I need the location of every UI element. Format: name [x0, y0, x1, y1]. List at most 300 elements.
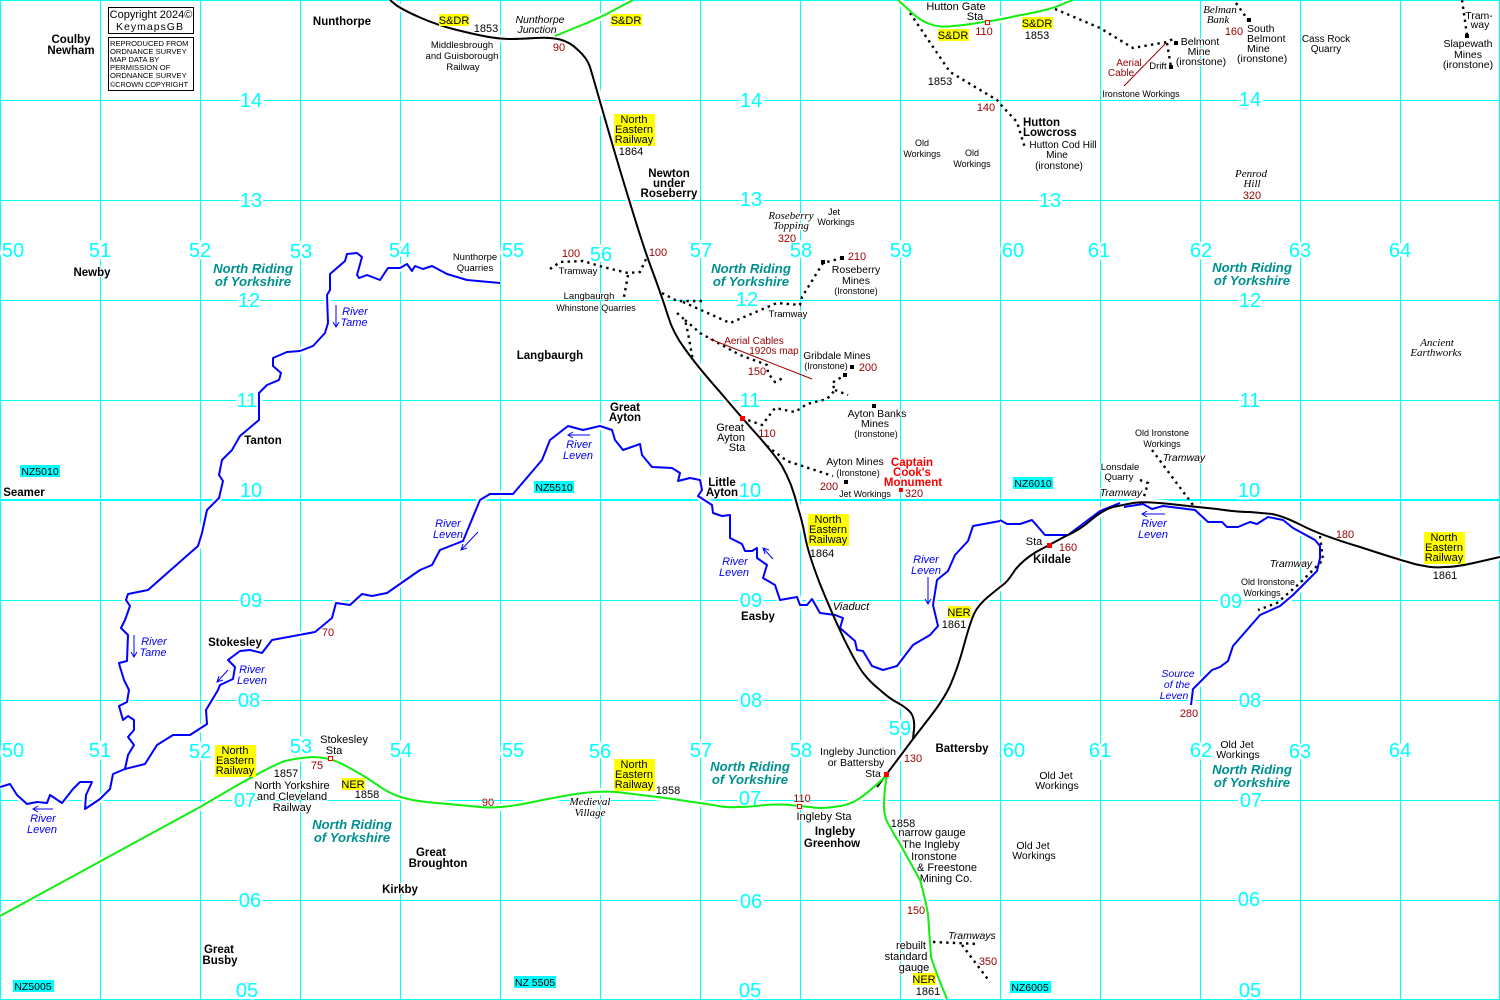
spot heights: 100: [649, 247, 667, 259]
ordnance survey notice: REPRODUCED FROM: [110, 39, 188, 48]
railway: Battersby to Kildale line: [877, 502, 1500, 787]
county labels: North Riding: [213, 261, 293, 276]
historic feature labels: Ancient: [1419, 337, 1455, 349]
spot heights: Aerial: [1116, 58, 1142, 69]
river labels: River: [239, 664, 266, 676]
railway and station labels: [254, 1, 1457, 998]
grid reference numbers: 11: [237, 390, 257, 412]
place names: Seamer: [3, 487, 45, 499]
ordnance survey notice: MAP DATA BY: [110, 55, 159, 64]
grid reference numbers: 63: [1289, 741, 1311, 763]
railway and station labels: rebuilt: [896, 940, 926, 952]
mines and quarries labels: Workings: [1216, 749, 1260, 761]
grid reference numbers: 13: [740, 189, 762, 211]
grid square tags: NZ6005: [1011, 982, 1049, 994]
mines and quarries labels: Old: [915, 138, 929, 148]
spot heights: 350: [979, 956, 997, 968]
grid reference numbers: 12: [736, 289, 758, 311]
mines and quarries labels: (ironstone): [1237, 53, 1287, 65]
river: Leven upper section: [1124, 504, 1320, 705]
mines and quarries labels: Workings: [903, 149, 941, 159]
railway and station labels: Mining Co.: [920, 873, 972, 885]
river labels: Leven: [433, 529, 463, 541]
county labels: of Yorkshire: [1214, 775, 1290, 790]
grid reference numbers: 06: [239, 890, 261, 912]
yellow railway labels: Railway: [615, 779, 654, 791]
mines and quarries labels: Jet Workings: [839, 489, 891, 499]
historic feature labels: Penrod: [1234, 168, 1267, 180]
mines and quarries labels: Lonsdale: [1101, 462, 1139, 473]
mines and quarries labels: Ayton Mines: [826, 456, 884, 468]
grid square tags: NZ 5505: [515, 977, 555, 989]
railway and station labels: Stokesley: [320, 734, 368, 746]
mines and quarries labels: Tramway: [1163, 452, 1206, 464]
place names: Great: [610, 402, 640, 414]
mines and quarries labels: Hutton Cod Hill: [1029, 140, 1097, 151]
railway and station labels: Sta: [326, 745, 343, 757]
river labels: River: [913, 554, 940, 566]
river labels: River: [435, 518, 462, 530]
mines and quarries labels: Tramway: [559, 266, 598, 277]
mines and quarries labels: Quarries: [457, 263, 493, 274]
yellow railway labels: Eastern: [216, 755, 254, 767]
spot heights: 160: [1059, 542, 1077, 554]
grid reference numbers: 11: [1240, 390, 1260, 412]
grid square tags: NZ5005: [14, 981, 52, 993]
mines and quarries labels: Old Ironstone: [1135, 428, 1189, 438]
place names: Tanton: [244, 435, 282, 447]
grid reference numbers: 57: [690, 740, 712, 762]
railway and station labels: 1858: [355, 789, 379, 801]
historic feature labels: Village: [575, 807, 606, 819]
mines and quarries labels: Mines: [1454, 49, 1482, 61]
mines and quarries labels: Mines: [861, 418, 889, 430]
spot heights: 140: [977, 102, 995, 114]
railway and station labels: Ingleby Junction: [820, 746, 896, 758]
grid reference numbers: 64: [1389, 240, 1411, 262]
historic feature labels: Bank: [1207, 14, 1230, 26]
mines and quarries labels: Jet: [828, 207, 840, 217]
river labels: Leven: [563, 450, 593, 462]
copyright box: Copyright 2024©: [110, 9, 192, 21]
grid reference numbers: 10: [1238, 480, 1260, 502]
grid reference numbers: 64: [1389, 740, 1411, 762]
green: North Yorkshire and Cleveland Railway: [0, 757, 887, 916]
railway and station labels: 1864: [619, 146, 643, 158]
grid reference numbers: 50: [2, 740, 24, 762]
spot heights: 180: [1336, 529, 1354, 541]
grid reference numbers: 61: [1089, 740, 1111, 762]
railway and station labels: 1853: [474, 23, 498, 35]
mines and quarries labels: (ironstone): [1035, 161, 1083, 172]
place names: Greenhow: [804, 838, 860, 850]
mines and quarries labels: Old: [965, 148, 979, 158]
county labels: of Yorkshire: [215, 274, 291, 289]
mines and quarries labels: Workings: [1243, 588, 1281, 598]
historic feature labels: Belman: [1203, 4, 1237, 16]
mines and quarries labels: Mines: [842, 275, 870, 287]
place names: Little: [708, 477, 736, 489]
railway and station labels: Junction: [516, 24, 557, 36]
yellow railway labels: Railway: [1425, 552, 1464, 564]
county labels: North Riding: [1212, 762, 1292, 777]
grid reference numbers: 07: [234, 790, 256, 812]
yellow railway labels: NER: [341, 779, 365, 791]
mines and quarries labels: Workings: [817, 217, 855, 227]
yellow railway labels: Eastern: [615, 769, 653, 781]
railway and station labels: 1864: [810, 548, 834, 560]
yellow railway labels: North: [621, 759, 647, 771]
place names: Coulby: [52, 34, 91, 46]
river flow arrows: [33, 305, 1165, 812]
railway and station labels: or Battersby: [828, 757, 885, 769]
county labels: North Riding: [1212, 260, 1292, 275]
railway and station labels: Sta: [967, 11, 984, 23]
railway and station labels: 1861: [942, 619, 966, 631]
railway and station labels: Sta: [1026, 536, 1043, 548]
mines and quarries labels: Nunthorpe: [453, 252, 497, 263]
river labels: River: [342, 306, 369, 318]
mines and quarries labels: Tram-: [1465, 10, 1493, 22]
railway and station labels: Great: [716, 422, 744, 434]
yellow railway labels: Railway: [615, 134, 654, 146]
station markers: [328, 20, 1052, 808]
railway and station labels: and Cleveland: [257, 791, 327, 803]
grid reference numbers: 54: [389, 240, 411, 262]
spot heights: Aerial Cables: [724, 336, 784, 347]
railway and station labels: Ingleby Sta: [796, 811, 852, 823]
green: Ingleby mining line: [884, 775, 947, 999]
mines and quarries labels: Belmont: [1181, 36, 1219, 48]
river labels: River: [1141, 518, 1168, 530]
spot heights: 100: [562, 248, 580, 260]
river labels: River: [566, 439, 593, 451]
green: Nunthorpe Junction branch: [555, 0, 633, 36]
yellow railway labels: S&DR: [1022, 18, 1052, 30]
spot heights: Cable: [1108, 68, 1134, 79]
yellow railway labels: S&DR: [611, 15, 641, 27]
railway and station labels: gauge: [899, 962, 929, 974]
yellow railway labels: North: [222, 745, 248, 757]
historic feature labels: Captain: [891, 457, 933, 469]
spot heights: 320: [778, 233, 796, 245]
mines and quarries labels: (Ironstone): [836, 468, 880, 478]
grid reference numbers: 62: [1190, 740, 1212, 762]
grid reference numbers: 06: [740, 891, 762, 913]
county labels: of Yorkshire: [712, 772, 788, 787]
grid reference numbers: 08: [740, 690, 762, 712]
yellow railway labels: S&DR: [938, 30, 968, 42]
place names: Newby: [73, 267, 111, 279]
place names: Lowcross: [1023, 127, 1077, 139]
grid reference numbers: 54: [390, 740, 412, 762]
place names: under: [653, 178, 685, 190]
mines and quarries labels: Tramway: [1100, 487, 1143, 499]
mines and quarries labels: Old Ironstone: [1241, 577, 1295, 587]
grid reference numbers: 07: [1240, 790, 1262, 812]
ordnance survey notice: ORDNANCE SURVEY: [110, 47, 187, 56]
railway and station labels: Railway: [273, 802, 312, 814]
river labels: Tame: [139, 647, 167, 659]
dotted tramways: [550, 0, 1467, 982]
river labels: [27, 306, 1195, 836]
railway and station labels: Middlesbrough: [431, 40, 493, 51]
spot heights: 200: [820, 481, 838, 493]
mines and quarries labels: Belmont: [1247, 33, 1286, 45]
historic feature labels: Roseberry: [767, 210, 814, 222]
river: Leven west section: [0, 426, 1000, 809]
railway and station labels: 1858: [891, 818, 915, 830]
spot heights: 90: [482, 797, 494, 809]
historic feature labels: Topping: [773, 220, 809, 232]
mines and quarries labels: Mine: [1188, 46, 1211, 58]
spot heights: 1920s map: [749, 346, 799, 357]
grid reference numbers: 53: [290, 736, 312, 758]
railway and station labels: narrow gauge: [898, 827, 966, 839]
place names: Great: [416, 847, 446, 859]
grid square tags: [13, 465, 1053, 994]
grid square tags: NZ5010: [21, 466, 59, 478]
grid reference numbers: 62: [1190, 240, 1212, 262]
yellow railway labels: NER: [947, 607, 971, 619]
river: Leven near Kildale: [1000, 503, 1120, 535]
river labels: River: [722, 556, 749, 568]
grid reference numbers: 12: [238, 290, 260, 312]
mines and quarries labels: Old Jet: [1016, 840, 1050, 852]
grid reference numbers: 10: [240, 480, 262, 502]
place names: Ayton: [609, 412, 641, 424]
river labels: Tame: [340, 317, 368, 329]
grid reference numbers: 13: [1039, 190, 1061, 212]
mines and quarries labels: Mine: [1046, 150, 1068, 161]
spot heights: 320: [1243, 190, 1261, 202]
historic feature labels: Monument: [884, 477, 942, 489]
railway and station labels: Viaduct: [833, 601, 870, 613]
grid reference numbers: 59: [890, 240, 912, 262]
grid reference numbers: 09: [240, 590, 262, 612]
yellow railway labels: NER: [912, 974, 936, 986]
mines and quarries labels: (ironstone): [1176, 56, 1226, 68]
mines and quarries labels: way: [1470, 19, 1490, 31]
yellow railway labels: North: [621, 114, 647, 126]
spot heights: 210: [848, 251, 866, 263]
railway and station labels: 1858: [656, 785, 680, 797]
railway and station labels: 1853: [1025, 30, 1049, 42]
river labels: Source: [1161, 668, 1195, 680]
railway and station labels: standard: [885, 951, 927, 963]
mines and quarries labels: (Ironstone): [854, 429, 898, 439]
mines and quarries labels: Ironstone Workings: [1102, 89, 1180, 99]
spot heights: 70: [322, 627, 334, 639]
grid reference numbers: 57: [690, 240, 712, 262]
mines and quarries labels: Tramways: [948, 930, 997, 942]
county labels: North Riding: [710, 759, 790, 774]
county labels: North Riding: [312, 817, 392, 832]
spot heights: 160: [1225, 26, 1243, 38]
grid reference numbers: 63: [1289, 240, 1311, 262]
grid reference numbers: 09: [1220, 591, 1242, 613]
mines and quarries labels: Cass Rock: [1302, 34, 1351, 45]
mines and quarries labels: Old Jet: [1039, 770, 1073, 782]
county labels: North Riding: [711, 261, 791, 276]
grid reference numbers: 61: [1088, 240, 1110, 262]
spot heights: 75: [311, 760, 323, 772]
railways: black lines: [390, 0, 1500, 787]
railway and station labels: 1853: [928, 76, 952, 88]
county labels: of Yorkshire: [314, 830, 390, 845]
green: Hutton Gate line: [898, 0, 1073, 27]
mines and quarries labels: Tramway: [769, 309, 808, 320]
mines and quarries labels: Workings: [1012, 850, 1056, 862]
grid reference numbers: 55: [502, 740, 524, 762]
mines and quarries labels: Mine: [1247, 43, 1270, 55]
railway and station labels: North Yorkshire: [254, 780, 330, 792]
river labels: of the: [1164, 679, 1190, 691]
place names: Newton: [648, 168, 690, 180]
spot heights: 150: [907, 905, 925, 917]
grid reference numbers: 50: [2, 240, 24, 262]
yellow railway labels: Eastern: [615, 124, 653, 136]
yellow railway labels: Eastern: [1425, 542, 1463, 554]
grid reference numbers: 51: [89, 740, 111, 762]
grid square tags: NZ6010: [1014, 478, 1052, 490]
place names: Roseberry: [641, 188, 698, 200]
river labels: Leven: [27, 824, 57, 836]
historic feature labels: Earthworks: [1409, 347, 1462, 359]
grid reference numbers: 08: [1239, 690, 1261, 712]
grid reference numbers: 58: [790, 740, 812, 762]
mines and quarries labels: Whinstone Quarries: [556, 303, 636, 313]
railway and station labels: and Guisborough: [426, 51, 498, 62]
place names: Ayton: [706, 487, 738, 499]
river labels: Leven: [911, 565, 941, 577]
aerial cables: [710, 43, 1166, 379]
grid reference numbers: 14: [1239, 89, 1261, 111]
grid reference numbers: 59: [889, 718, 911, 740]
ordnance survey notice: [108, 38, 194, 90]
railway and station labels: Hutton Gate: [926, 1, 986, 13]
yellow railway labels: Eastern: [809, 524, 847, 536]
railway: North Eastern main line: [390, 0, 914, 739]
mines and quarries labels: Quarry: [1104, 472, 1134, 483]
spot heights: 150: [748, 366, 766, 378]
place names: Easby: [741, 611, 776, 623]
railway and station labels: 1861: [1433, 570, 1457, 582]
railway and station labels: The Ingleby: [902, 839, 960, 851]
yellow railway labels: Railway: [216, 765, 255, 777]
grid reference numbers: 12: [1239, 290, 1261, 312]
county labels: of Yorkshire: [1214, 273, 1290, 288]
historic feature labels: Hill: [1242, 178, 1261, 190]
grid reference numbers: 51: [89, 240, 111, 262]
grid reference numbers: 56: [590, 244, 612, 266]
yellow railway labels: Railway: [809, 534, 848, 546]
spot heights: 90: [553, 42, 565, 54]
place names: Stokesley: [208, 637, 262, 649]
place names: Battersby: [935, 743, 989, 755]
grid reference numbers: 09: [740, 590, 762, 612]
river labels: Leven: [1160, 690, 1188, 702]
mines and quarries labels: (ironstone): [1443, 59, 1493, 71]
railway and station labels: 1857: [274, 768, 298, 780]
grid reference numbers: 52: [189, 741, 211, 763]
mines and quarries labels: Slapewath: [1443, 38, 1493, 50]
river labels: River: [30, 813, 57, 825]
yellow railway labels: S&DR: [439, 15, 469, 27]
grid reference numbers: 13: [240, 190, 262, 212]
county labels: of Yorkshire: [713, 274, 789, 289]
river labels: River: [141, 636, 168, 648]
river labels: Leven: [1138, 529, 1168, 541]
grid reference numbers: 55: [502, 240, 524, 262]
river: Tame: [119, 253, 500, 769]
mines and quarries labels: (Ironstone): [804, 361, 848, 371]
railway and station labels: Ironstone: [911, 851, 957, 863]
mines and quarries labels: Workings: [1143, 439, 1181, 449]
place names: Kirkby: [382, 884, 418, 896]
rivers: [0, 253, 1320, 809]
grid reference numbers: 08: [238, 690, 260, 712]
railway and station labels: Nunthorpe: [515, 14, 565, 26]
mines and quarries labels: Workings: [953, 159, 991, 169]
spot heights: 320: [905, 488, 923, 500]
railways: green lines: [0, 0, 1073, 999]
grid reference numbers: 58: [790, 240, 812, 262]
grid reference numbers: 56: [589, 741, 611, 763]
historic feature labels: Medieval: [569, 796, 610, 808]
place names: Ingleby: [815, 826, 856, 838]
spot heights: 110: [793, 793, 811, 805]
spot heights: 110: [758, 428, 776, 440]
copyright box: [108, 8, 194, 34]
mines and quarries labels: Old Jet: [1220, 739, 1254, 751]
yellow railway labels: North: [815, 514, 841, 526]
railway and station labels: & Freestone: [917, 862, 977, 874]
place names: Great: [204, 944, 234, 956]
county labels: [213, 260, 1292, 845]
spot heights: 280: [1180, 708, 1198, 720]
grid reference numbers: 06: [1238, 889, 1260, 911]
mines and quarries labels: (Ironstone): [834, 286, 878, 296]
grid square tags: NZ5510: [535, 482, 573, 494]
grid reference numbers: 60: [1002, 240, 1024, 262]
place names: Kildale: [1033, 554, 1071, 566]
grid reference numbers: 07: [739, 788, 761, 810]
historic feature labels: [569, 4, 1462, 819]
mines and quarries labels: Ayton Banks: [848, 408, 906, 420]
spot heights: 130: [904, 753, 922, 765]
railway and station labels: Railway: [446, 62, 480, 73]
railway and station labels: 1861: [916, 986, 940, 998]
spot heights: 110: [975, 26, 993, 38]
mines and quarries labels: Quarry: [1311, 44, 1341, 55]
river labels: Leven: [237, 675, 267, 687]
grid reference numbers: 14: [240, 90, 262, 112]
river labels: Leven: [719, 567, 749, 579]
mines and quarries labels: Tramway: [1270, 558, 1313, 570]
yellow railway labels: North: [1431, 532, 1457, 544]
mines and quarries labels: South: [1247, 23, 1275, 35]
copyright box: KeymapsGB: [116, 21, 184, 33]
mines and quarries labels: Gribdale Mines: [803, 351, 871, 362]
grid reference numbers: 60: [1003, 740, 1025, 762]
historic feature labels: Cook's: [893, 467, 931, 479]
grid reference numbers: 52: [189, 240, 211, 262]
ordnance survey notice: ©CROWN COPYRIGHT: [110, 80, 189, 89]
grid reference numbers: 14: [740, 90, 762, 112]
mines and quarries labels: Roseberry: [832, 264, 881, 276]
railway and station labels: Ayton: [717, 432, 745, 444]
